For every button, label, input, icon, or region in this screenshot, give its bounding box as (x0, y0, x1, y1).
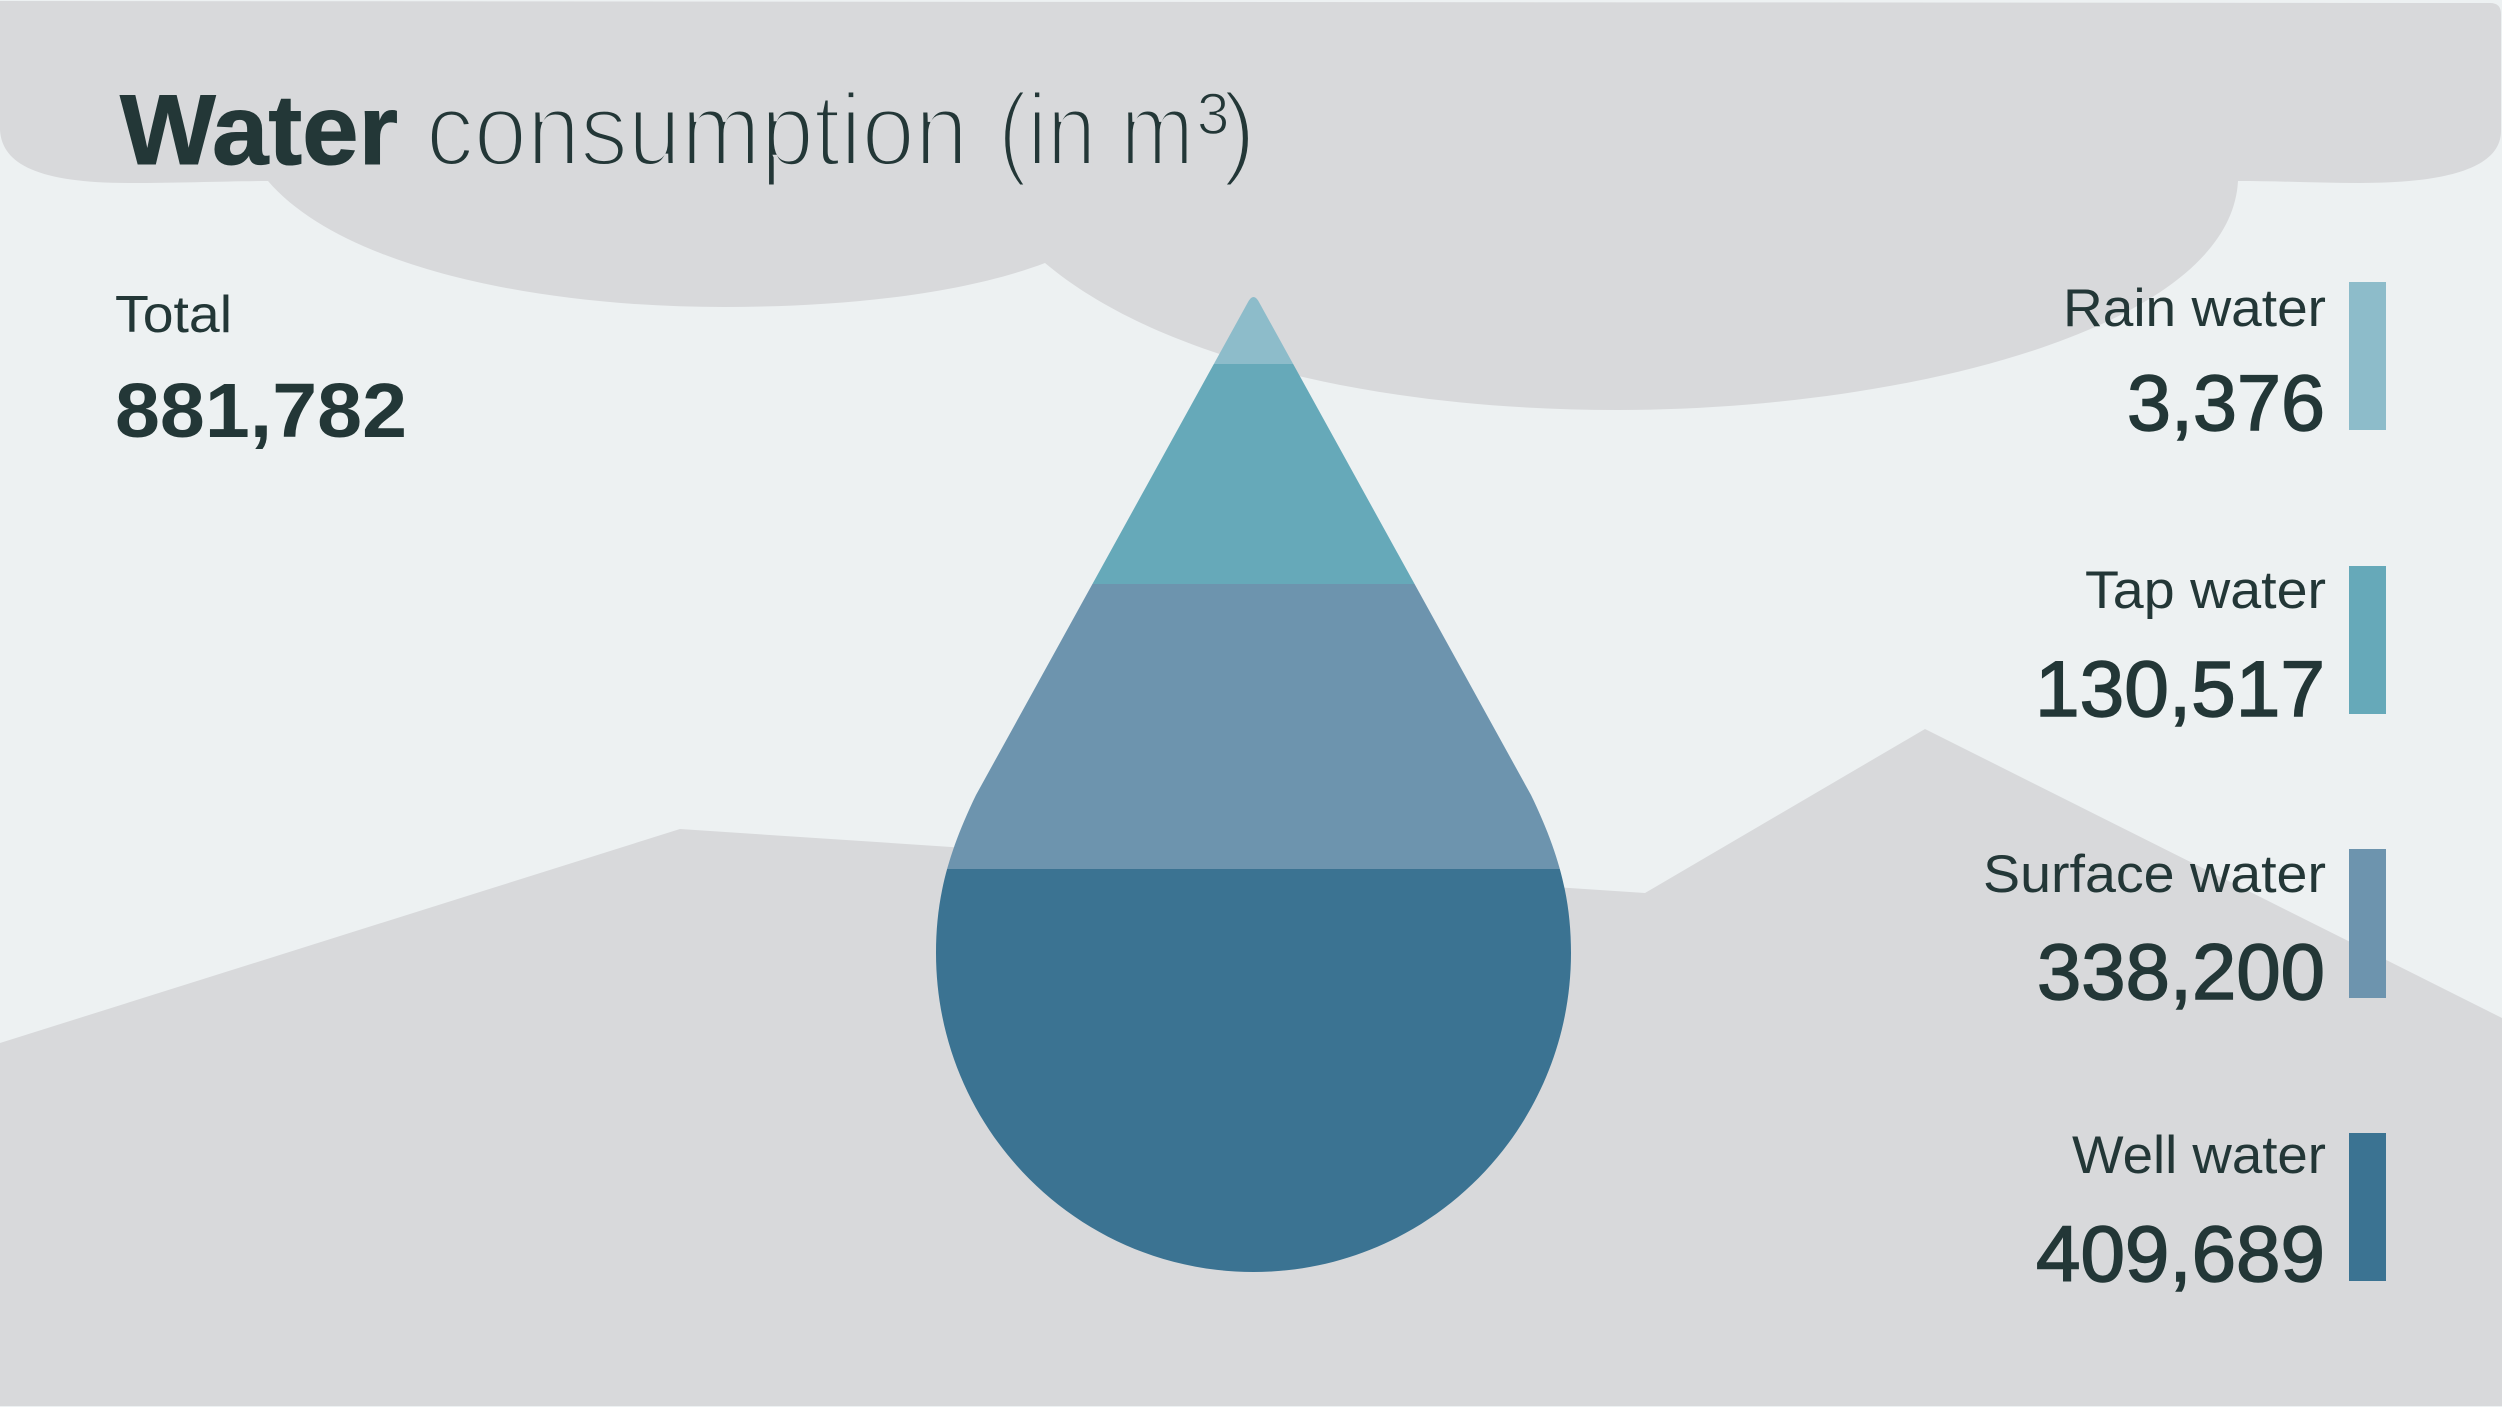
legend: surface water: Surface water (1983, 845, 2326, 904)
legend: tap water: Tap water (2085, 561, 2326, 620)
legend: surface water (1983, 845, 2386, 1016)
title: Water (120, 74, 398, 185)
drop band: well water (930, 869, 1580, 1279)
title (120, 72, 1256, 187)
total block: Total (115, 286, 232, 344)
legend: tap water: 130,517 (2035, 644, 2325, 733)
title: consumption (426, 72, 968, 187)
drop band: tap water (1092, 364, 1414, 584)
title: (in m (998, 72, 1194, 187)
cloud shape (0, 1, 2501, 410)
legend: tap water (2035, 561, 2386, 733)
legend: rain water: Rain water (2063, 279, 2326, 338)
legend: rain water: 3,376 (2127, 358, 2325, 447)
total block: 881,782 (115, 368, 407, 454)
drop band: rain water (1214, 297, 1293, 364)
legend: surface water: 338,200 (2037, 927, 2325, 1016)
drop band: surface water (930, 584, 1580, 869)
water drop chart (930, 290, 1580, 1279)
title: ) (1222, 72, 1256, 187)
total block (115, 286, 407, 454)
mountains (0, 729, 2502, 1406)
title: 3 (1197, 82, 1229, 147)
legend: well water: 409,689 (2036, 1209, 2325, 1298)
legend: rain water (2063, 279, 2386, 447)
legend: well water (2036, 1126, 2386, 1298)
legend: well water: Well water (2072, 1126, 2326, 1185)
